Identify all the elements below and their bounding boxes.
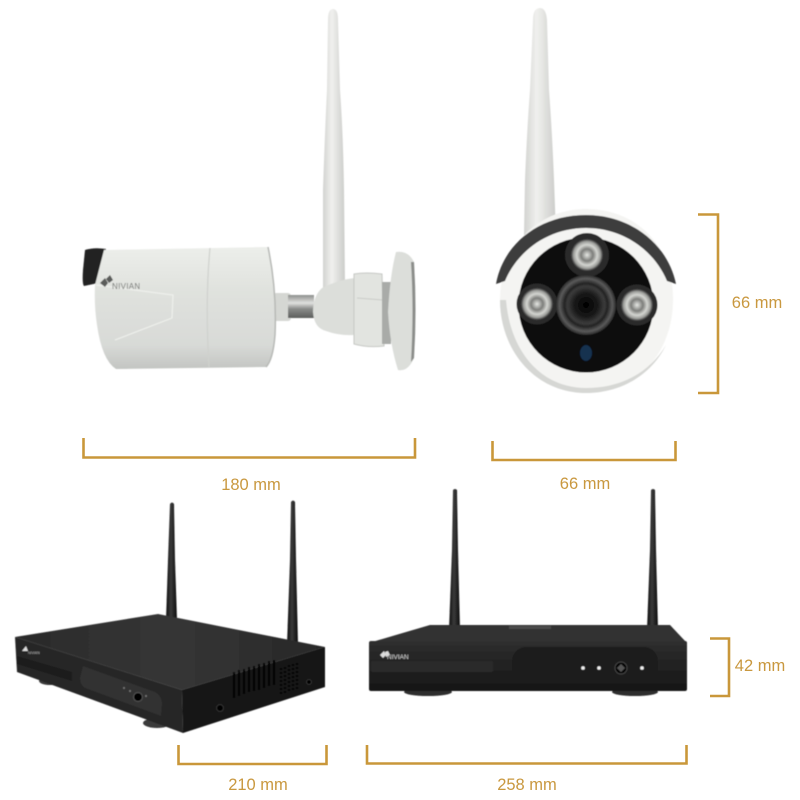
brand logo on recorder: NIVIAN <box>28 651 40 655</box>
icon: central lens <box>556 275 616 335</box>
icon: left antenna front <box>449 489 460 630</box>
dimension: camera height: 66 mm <box>732 294 782 312</box>
icon: control knob front <box>615 662 627 674</box>
camera front view <box>496 8 676 393</box>
dimension: camera width: 66 mm <box>560 475 610 493</box>
camera side view <box>83 9 416 370</box>
icon: left antenna <box>166 502 177 620</box>
icon: front camera visor <box>496 215 676 284</box>
recorder side face <box>182 647 325 733</box>
black lens plate <box>518 238 654 372</box>
icon: left LED <box>516 284 558 324</box>
recorder top face <box>15 614 325 690</box>
icon: top LED <box>565 233 609 277</box>
brand logo on side camera <box>100 275 140 291</box>
recorder front face <box>15 637 183 733</box>
icon: front camera housing <box>500 209 673 393</box>
antenna connector <box>306 680 312 684</box>
icon: side camera body <box>95 247 275 369</box>
ventilation grid <box>281 663 297 695</box>
dimension: recorder depth <box>178 745 326 794</box>
dimension: camera length <box>84 438 415 494</box>
recorder front <box>369 641 687 691</box>
dimension: recorder width: 258 mm <box>497 776 557 794</box>
dimension: recorder width <box>367 745 686 794</box>
ventilation slats <box>234 660 274 698</box>
recorder top <box>372 625 686 642</box>
dimension: camera length: 180 mm <box>221 476 281 494</box>
icon: front camera antenna <box>524 8 556 235</box>
disc slot <box>371 661 493 672</box>
dimension: camera width <box>492 441 676 493</box>
dimension: camera height <box>698 214 782 393</box>
icon: side camera antenna <box>323 9 345 288</box>
brand logo front <box>380 651 409 661</box>
dimension: recorder depth: 210 mm <box>228 776 288 794</box>
card slot <box>17 656 72 681</box>
front panel <box>80 666 162 716</box>
icon: side camera mount arm <box>273 252 416 370</box>
dimension: recorder height <box>710 638 785 696</box>
icon: right antenna <box>287 500 298 645</box>
recorder perspective view <box>15 500 325 733</box>
status LEDs <box>581 666 644 670</box>
recorder front view <box>369 489 687 696</box>
brand logo on side camera: NIVIAN <box>112 282 140 291</box>
icon: side camera visor <box>83 248 106 286</box>
brand logo front: NIVIAN <box>387 654 409 661</box>
control panel <box>512 647 658 683</box>
icon: right LED <box>616 284 658 326</box>
feet <box>404 688 658 696</box>
icon: control knob <box>123 687 147 702</box>
icon: right antenna front <box>647 489 658 630</box>
dimension: recorder height: 42 mm <box>735 657 785 675</box>
feet <box>39 677 171 728</box>
icon: blue sensor <box>580 345 592 361</box>
power jack <box>216 704 224 712</box>
brand logo on recorder <box>22 646 40 655</box>
